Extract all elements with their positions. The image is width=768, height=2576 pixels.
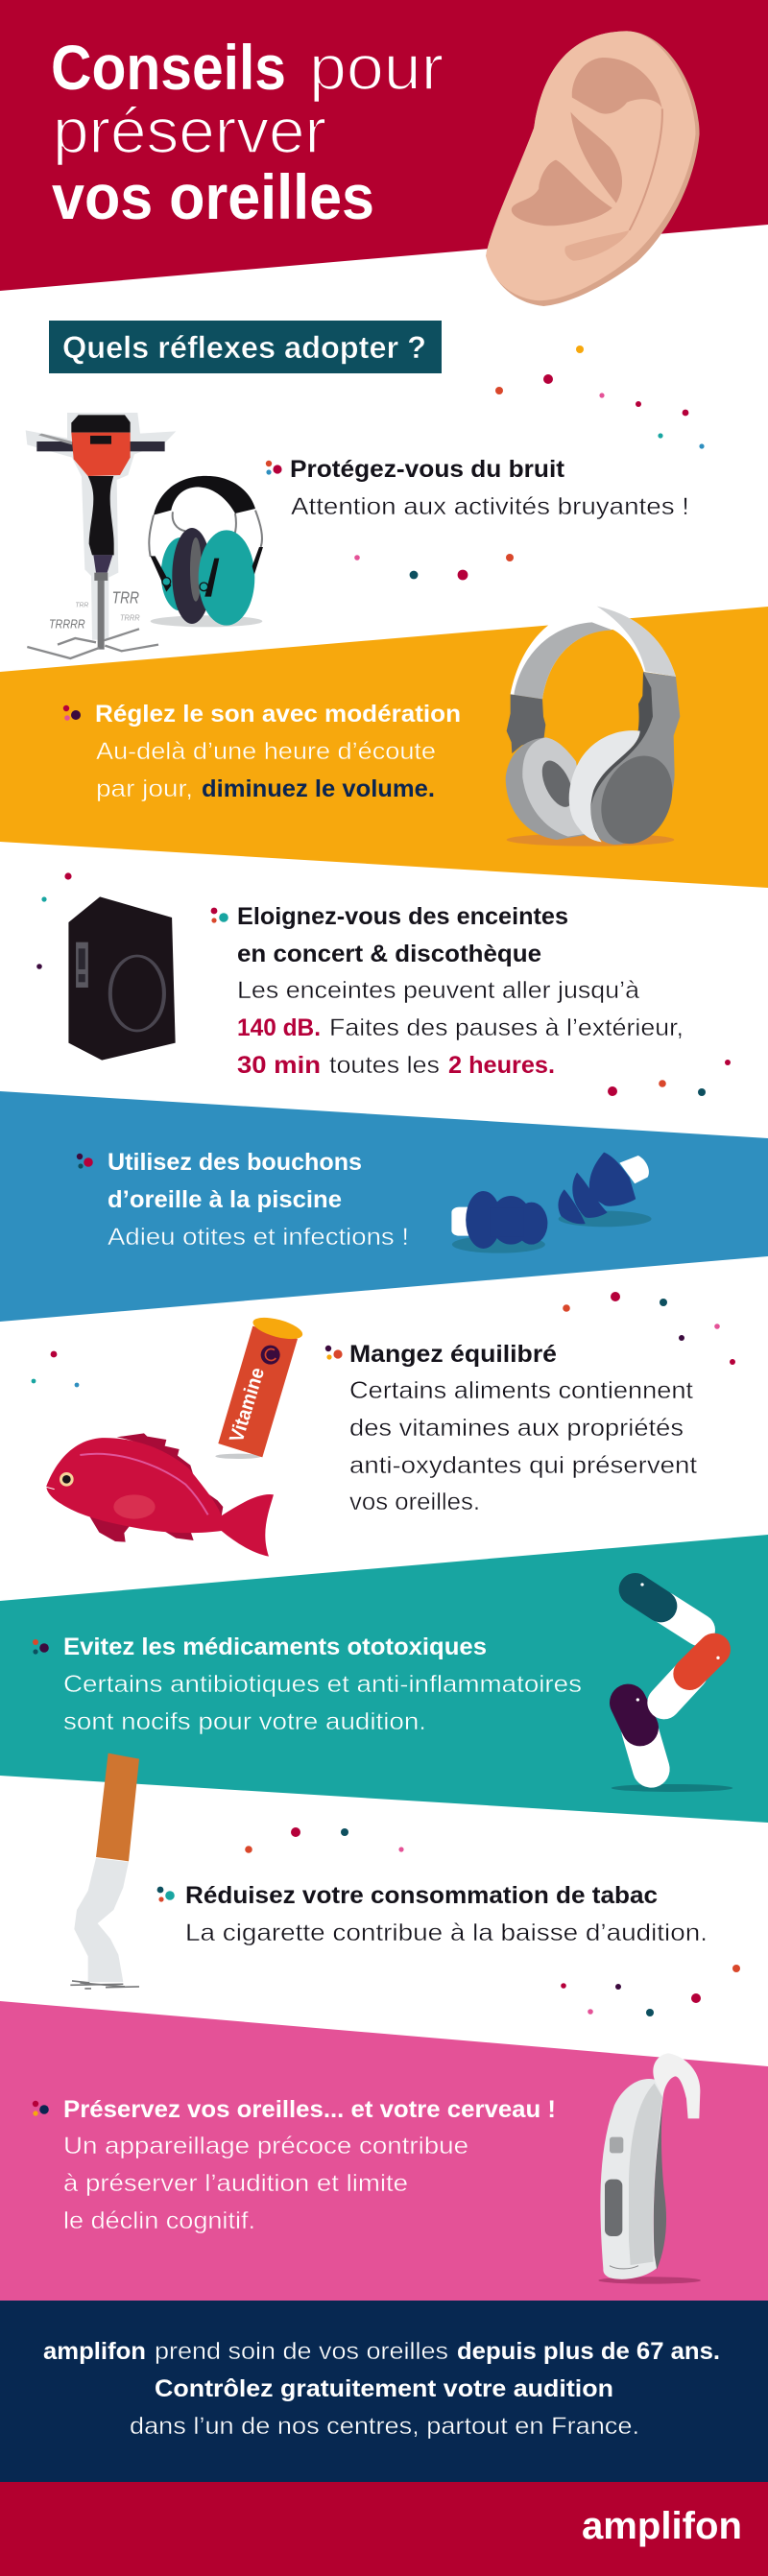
tip 3: speakers xyxy=(211,903,684,1079)
footer text: Contrôlez gratuitement votre audition xyxy=(155,2375,613,2402)
tip 4: earplugs: Utilisez des bouchons xyxy=(108,1149,362,1176)
icon: cigarette xyxy=(70,1753,139,1989)
tip 5: eat balanced xyxy=(325,1341,697,1515)
title: pour xyxy=(309,32,444,103)
tip 7: tobacco: Réduisez votre consommation de tabac xyxy=(185,1882,658,1909)
tip 5: eat balanced: Mangez équilibré xyxy=(349,1341,557,1368)
footer text xyxy=(43,2338,720,2440)
title: vos oreilles xyxy=(52,161,374,232)
icon: headphones xyxy=(506,607,684,854)
tip 2: volume: Réglez le son avec modération xyxy=(95,701,461,727)
icon: jackhammer: TRRRR xyxy=(49,617,85,632)
tip 1: protect from noise: Attention aux activités bruyantes ! xyxy=(291,493,689,520)
tip 3: speakers: toutes les xyxy=(329,1052,440,1079)
tip 3: speakers: Faites des pauses à l’extérieur, xyxy=(329,1014,684,1041)
tip 8: hearing aid and brain xyxy=(33,2096,556,2234)
tip 8: hearing aid and brain: Un appareillage précoce contribue xyxy=(63,2133,468,2159)
heading: Quels réflexes adopter: Quels réflexes adopter ? xyxy=(62,330,426,365)
icon: ear xyxy=(486,31,700,306)
tip 8: hearing aid and brain: Préservez vos oreilles... et votre cerveau ! xyxy=(63,2096,556,2123)
heading: Quels réflexes adopter xyxy=(49,321,442,373)
tip 8: hearing aid and brain: le déclin cognitif. xyxy=(63,2207,255,2234)
tip 1: protect from noise: Protégez-vous du bruit xyxy=(290,456,565,483)
tip 6: ototoxic medication: Certains antibiotiques et anti-inflammatoires xyxy=(63,1671,582,1698)
panel: crimson logo band xyxy=(0,2482,768,2576)
tip 4: earplugs xyxy=(77,1149,409,1251)
footer text: dans l’un de nos centres, partout en France. xyxy=(130,2413,639,2440)
tip 8: hearing aid and brain: à préserver l’audition et limite xyxy=(63,2170,408,2197)
tip 5: eat balanced: des vitamines aux propriétés xyxy=(349,1415,684,1442)
tip 2: volume: diminuez le volume. xyxy=(202,775,435,802)
icon: jackhammer: TRR xyxy=(112,588,139,608)
tip 4: earplugs: Adieu otites et infections ! xyxy=(108,1224,409,1251)
title xyxy=(51,32,444,232)
footer text: depuis plus de 67 ans. xyxy=(457,2338,720,2365)
tip 5: eat balanced: vos oreilles. xyxy=(349,1489,480,1515)
decorative dots: tobacco section xyxy=(245,1827,740,2016)
tip 6: ototoxic medication: sont nocifs pour votre audition. xyxy=(63,1708,426,1735)
tip 4: earplugs: d’oreille à la piscine xyxy=(108,1186,342,1213)
tip 3: speakers: 2 heures. xyxy=(448,1052,555,1079)
logo: amplifon: amplifon xyxy=(582,2505,742,2547)
panel: yellow band xyxy=(0,607,768,888)
footer text: prend soin de vos oreilles xyxy=(155,2338,448,2365)
icon: jackhammer xyxy=(26,413,176,658)
tip 3: speakers: Eloignez-vous des enceintes xyxy=(237,903,568,930)
panel: navy footer band xyxy=(0,2301,768,2482)
tip 3: speakers: Les enceintes peuvent aller jusqu’à xyxy=(237,977,639,1004)
tip 6: ototoxic medication xyxy=(33,1634,582,1735)
tip 3: speakers: 30 min xyxy=(237,1052,321,1079)
tip 6: ototoxic medication: Evitez les médicaments ototoxiques xyxy=(63,1634,487,1660)
tip 7: tobacco xyxy=(157,1882,708,1946)
icon: vitamin tube: Vitamine xyxy=(226,1365,269,1444)
icon: jackhammer: TRRR xyxy=(120,614,140,623)
tip 3: speakers: 140 dB. xyxy=(237,1014,321,1041)
icon: hearing aid xyxy=(598,2053,701,2284)
panel: teal band xyxy=(0,1535,768,1823)
icon: pills xyxy=(612,1583,732,1792)
tip 3: speakers: en concert & discothèque xyxy=(237,941,541,967)
icon: loudspeaker xyxy=(68,896,176,1061)
tip 5: eat balanced: anti-oxydantes qui préservent xyxy=(349,1452,697,1479)
icon: fish xyxy=(46,1433,274,1557)
icon: jackhammer: TRR xyxy=(75,600,89,608)
title: Conseils xyxy=(51,32,286,103)
tip 2: volume: par jour, xyxy=(96,775,193,802)
panel: pink band xyxy=(0,2001,768,2301)
tip 2: volume xyxy=(63,701,461,802)
decorative dots: speaker section xyxy=(36,872,731,1096)
decorative dots: top xyxy=(354,346,705,580)
icon: earplugs xyxy=(451,1153,652,1253)
tip 7: tobacco: La cigarette contribue à la baisse d’audition. xyxy=(185,1920,708,1946)
decorative dots: nutrition section xyxy=(32,1292,735,1387)
icon: vitamin tube xyxy=(215,1313,304,1459)
panel: header background xyxy=(0,0,768,291)
footer text: amplifon xyxy=(43,2338,146,2365)
tip 1: protect from noise xyxy=(266,456,689,520)
panel: blue band xyxy=(0,1091,768,1322)
title: préserver xyxy=(53,95,326,166)
icon: ear defenders xyxy=(149,476,263,627)
tip 5: eat balanced: Certains aliments contiennent xyxy=(349,1377,693,1404)
tip 2: volume: Au-delà d’une heure d’écoute xyxy=(96,738,436,765)
